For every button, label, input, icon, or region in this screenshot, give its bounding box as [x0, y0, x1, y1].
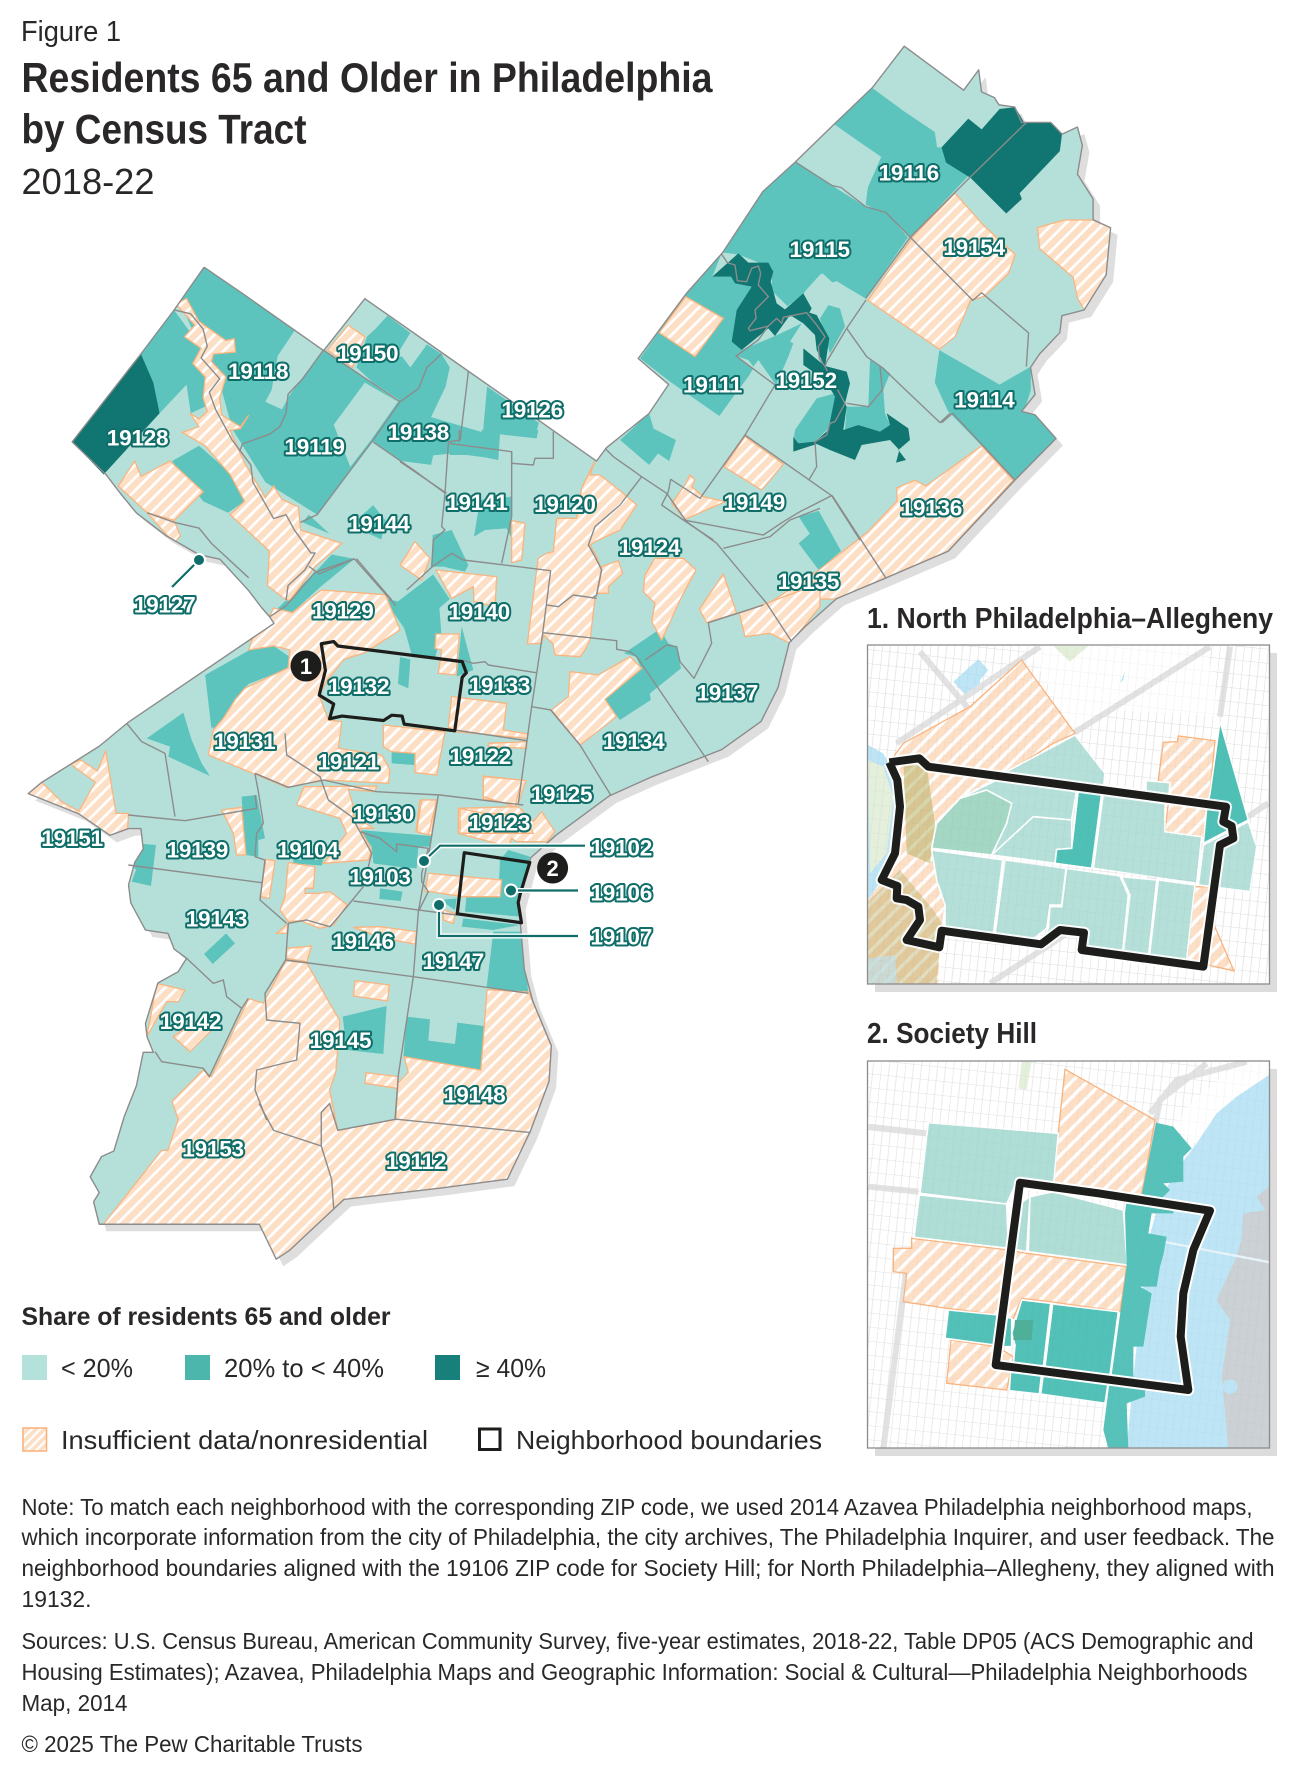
note text: Note: To match each neighborhood with the corresponding ZIP code, we used 2014 Azavea Philadelphia neighborhood maps,: [22, 1494, 1252, 1520]
note text: 19132.: [22, 1586, 92, 1612]
ZIP code labels: 19142: [160, 1009, 221, 1034]
inset 2 river: [1127, 1075, 1269, 1448]
inset 2 border: [868, 1061, 1270, 1448]
marker 2: 2: [546, 856, 559, 881]
note text: [21, 1494, 1274, 1612]
ZIP code labels: 19130: [353, 801, 414, 826]
ZIP code labels: 19129: [312, 598, 374, 623]
inset 2 New Jersey land: [1217, 1187, 1269, 1448]
inset 1 tract fills: [932, 722, 1257, 960]
ZIP code labels: 19149: [724, 490, 785, 515]
ZIP code labels: 19128: [107, 426, 168, 451]
copyright: © 2025 The Pew Charitable Trusts: [22, 1731, 362, 1757]
ZIP code labels: 19122: [450, 744, 511, 769]
map drop shadow: [35, 53, 1118, 1266]
ZIP code labels: 19119: [284, 435, 345, 460]
neighborhood boundaries on main map: [319, 642, 530, 923]
legend item: under 20 percent: < 20%: [61, 1353, 133, 1383]
ZIP code labels: 19112: [386, 1149, 446, 1174]
ZIP code labels: 19150: [337, 341, 398, 366]
inset 2 neighborhood boundary: [996, 1183, 1210, 1390]
legend item: insufficient data: Insufficient data/nonresidential: [61, 1425, 428, 1455]
ZIP code labels: 19118: [228, 359, 288, 384]
inset 2 frame: [868, 1061, 1270, 1448]
note text: which incorporate information from the city of Philadelphia, the city archives, The Philadelphia Inquirer, and user feedback. The: [21, 1524, 1274, 1550]
inset 2 insufficient data areas: [893, 1069, 1155, 1390]
callout leaders and dots: [172, 554, 585, 936]
ZIP code labels: 19106: [590, 880, 652, 905]
ZIP code labels: 19121: [318, 749, 379, 775]
inset 2 map content: [868, 1062, 1269, 1448]
marker 2: [537, 852, 568, 884]
ZIP code labels: 19124: [619, 535, 681, 560]
ZIP code labels: 19144: [348, 511, 410, 536]
ZIP code labels: 19132: [328, 674, 389, 699]
sources text: Sources: U.S. Census Bureau, American Community Survey, five-year estimates, 2018-22, Table DP05 (ACS Demographic and: [22, 1628, 1254, 1654]
map base: under 20 percent tracts: [28, 46, 1111, 1259]
ZIP code labels: 19153: [182, 1137, 244, 1162]
ZIP code labels: 19127: [134, 593, 195, 618]
ZIP code labels: 19126: [501, 397, 563, 422]
legend item: under 20 percent: [22, 1353, 133, 1383]
ZIP code labels: 19154: [943, 235, 1006, 260]
ZIP code labels: 19134: [603, 729, 665, 754]
tracts: insufficient data or nonresidential: [28, 193, 1111, 1264]
ZIP code labels: 19151: [41, 826, 103, 851]
ZIP code labels: 19104: [277, 838, 339, 863]
ZIP code labels: [41, 160, 1015, 1174]
inset 1 neighborhood boundary: [882, 758, 1233, 967]
inset 1 frame: [868, 645, 1270, 984]
ZIP code labels: 19136: [901, 496, 962, 521]
subtitle: years: 2018-22: [22, 161, 154, 202]
marker 1: [290, 650, 322, 682]
figure label: Figure 1: [21, 16, 121, 48]
city outline: [28, 46, 1111, 1259]
title: [22, 54, 713, 152]
ZIP code labels: 19133: [469, 673, 530, 698]
panel: inset 2 map: [868, 1061, 1277, 1456]
ZIP code labels: 19147: [422, 949, 484, 974]
panel: inset 1 map: [868, 645, 1277, 992]
ZIP code labels: 19107: [590, 924, 652, 949]
ZIP code labels: 19115: [790, 237, 850, 262]
legend item: 40 percent or more: ≥ 40%: [476, 1353, 546, 1383]
inset 2 road lines: [868, 1062, 1247, 1448]
ZIP code labels: 19141: [446, 490, 508, 515]
ZIP code labels: 19116: [879, 160, 939, 185]
ZIP code labels: 19123: [469, 810, 530, 835]
ZIP code labels: 19143: [186, 906, 247, 931]
marker 1: 1: [300, 654, 312, 679]
ZIP code labels: 19139: [167, 838, 228, 863]
sources text: Housing Estimates); Azavea, Philadelphia Maps and Geographic Information: Social & Cultural—Philadelphia Neighborhoods: [22, 1659, 1248, 1685]
tracts: 20 to under 40 percent: [130, 88, 1056, 1071]
legend item: 40 percent or more: [435, 1353, 546, 1383]
ZIP code labels: 19137: [696, 681, 758, 706]
ZIP code labels: 19152: [775, 368, 837, 393]
ZIP code labels: 19125: [531, 782, 592, 807]
legend item: neighborhood boundaries: Neighborhood boundaries: [516, 1425, 822, 1455]
inset 1 insufficient data areas: [868, 660, 1234, 985]
inset 2 waterfront tract: [1103, 1123, 1192, 1448]
panel: legend: [22, 1303, 822, 1455]
inset 2 tract fills: [914, 1123, 1127, 1403]
title: Residents 65 and Older in Philadelphia: [22, 54, 713, 101]
ZIP code labels: 19145: [310, 1028, 371, 1053]
inset 1 shadow: [875, 653, 1277, 992]
inset 2 shadow: [875, 1069, 1277, 1456]
ZIP code labels: 19114: [954, 387, 1015, 412]
legend heading: Share of residents 65 and older: [22, 1303, 391, 1331]
sources text: Map, 2014: [22, 1690, 128, 1716]
ZIP code labels: 19131: [214, 729, 275, 754]
ZIP code labels: 19111: [683, 373, 742, 398]
inset heading: Society Hill: 2. Society Hill: [867, 1018, 1037, 1050]
sources text: [22, 1628, 1254, 1716]
ZIP code labels: 19146: [332, 929, 394, 954]
ZIP code boundaries: [28, 46, 1111, 1259]
ZIP code labels: 19148: [444, 1082, 505, 1107]
light tract overlays within teal areas: [265, 273, 865, 467]
inset heading: North Philadelphia-Allegheny: 1. North Philadelphia–Allegheny: [867, 603, 1273, 635]
legend item: 20 to under 40 percent: 20% to < 40%: [224, 1353, 384, 1383]
ZIP code labels: 19120: [534, 492, 596, 517]
note text: neighborhood boundaries aligned with the 19106 ZIP code for Society Hill; for North Philadelphia–Allegheny, they aligned with: [22, 1555, 1274, 1581]
panel: main city map: [28, 46, 1118, 1266]
ZIP code labels: 19103: [349, 865, 411, 890]
ZIP code labels: 19138: [388, 420, 449, 445]
inset 1 border: [868, 645, 1270, 984]
inset 1 road lines: [897, 647, 1268, 983]
title: by Census Tract: [22, 106, 306, 152]
ZIP code labels: 19102: [590, 835, 652, 860]
ZIP code labels: 19140: [448, 599, 510, 624]
inset 1 map content: [868, 646, 1269, 985]
tracts: 40 percent or more: [73, 107, 1062, 474]
ZIP code labels: 19135: [778, 569, 839, 594]
